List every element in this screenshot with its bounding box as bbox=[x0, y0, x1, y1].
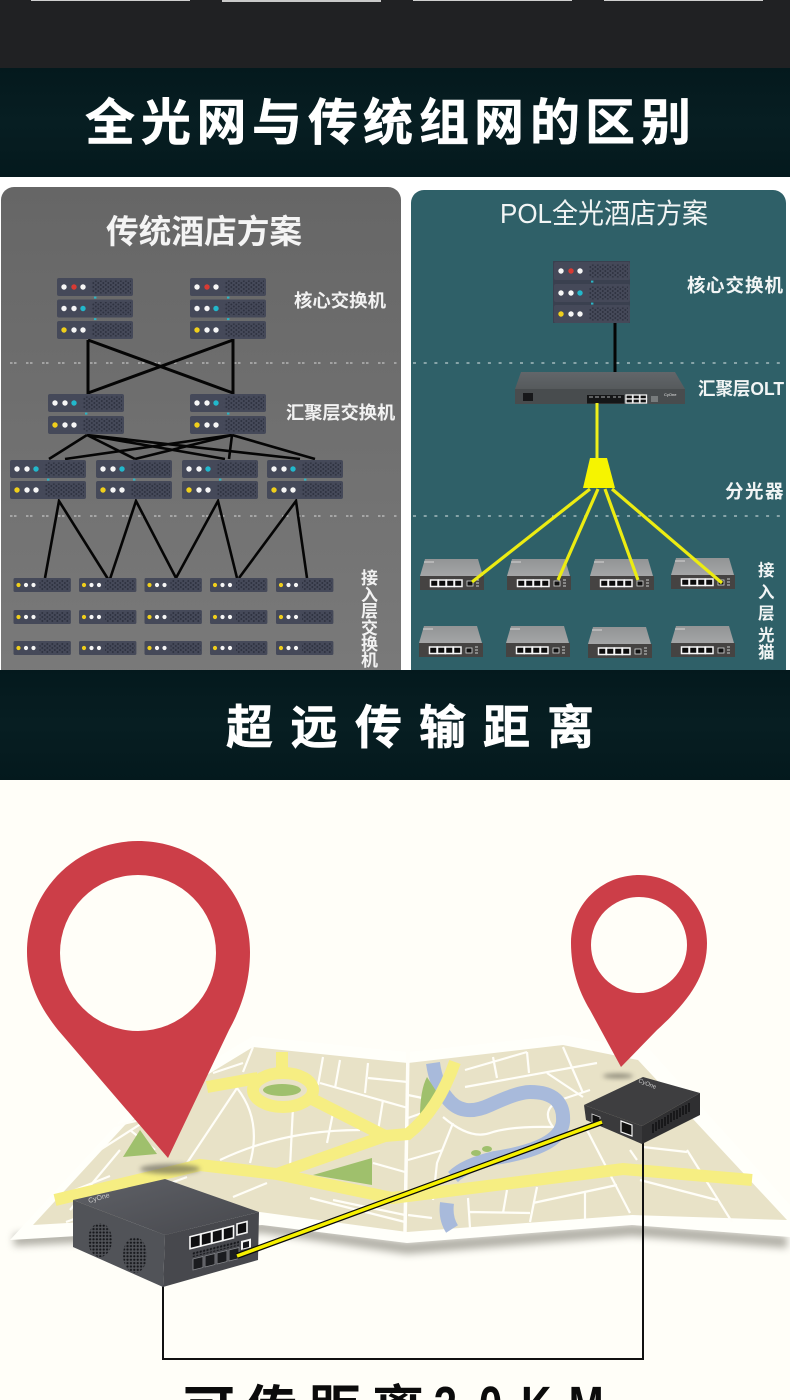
link: core to OLT bbox=[614, 323, 616, 373]
panel bottom white gap cover on the left and right edges bbox=[0, 640, 790, 671]
illustration: folded city map bbox=[10, 1035, 790, 1254]
green parks bbox=[123, 1077, 492, 1185]
label: aggregation OLT: 汇聚层OLT bbox=[698, 379, 784, 399]
pin hole bbox=[591, 897, 687, 993]
front ports bbox=[190, 1220, 251, 1271]
label: core switch: 核心交换机 bbox=[687, 275, 784, 296]
OLT mini device, lower left bbox=[73, 1179, 259, 1287]
distance caption, clipped by page edge bbox=[183, 1376, 604, 1400]
tier dividers bbox=[413, 363, 784, 516]
panel title: POL: POL全光酒店方案 bbox=[500, 198, 708, 229]
side vents bbox=[653, 1103, 689, 1133]
label: access modem, vertical: 接入层光猫 bbox=[758, 561, 775, 662]
river bbox=[433, 1063, 563, 1229]
street grid bbox=[60, 1047, 732, 1232]
label: core switch: 核心交换机 bbox=[294, 290, 387, 311]
heading band: 超远传输距离: 超远传输距离 bbox=[226, 701, 594, 754]
panel: traditional hotel solution bbox=[1, 187, 401, 687]
core to aggregation links bbox=[88, 340, 233, 393]
OLT device bbox=[515, 372, 685, 404]
pin shadow bbox=[140, 1164, 200, 1174]
mini modem device, right bbox=[584, 1077, 700, 1144]
small location pin bbox=[571, 875, 707, 1078]
panel title: traditional: 传统酒店方案 bbox=[106, 213, 302, 250]
side vents bbox=[88, 1223, 112, 1257]
paper shadow bbox=[14, 1222, 787, 1254]
pin body bbox=[27, 841, 250, 1158]
OLT logo: CyOne bbox=[664, 392, 677, 397]
aggregation switches bbox=[48, 394, 266, 434]
yellow fibre cable between devices bbox=[237, 1122, 602, 1256]
pin shadow bbox=[603, 1074, 633, 1078]
fibre port bbox=[592, 1114, 600, 1125]
label: splitter: 分光器 bbox=[725, 481, 784, 502]
label: access switch, vertical: 接入层交换机 bbox=[361, 569, 378, 670]
distribution to access links bbox=[45, 501, 307, 579]
access switches bbox=[14, 578, 333, 655]
pin body bbox=[571, 875, 707, 1067]
label: aggregation switch: 汇聚层交换机 bbox=[286, 402, 395, 423]
fibre: OLT to splitter bbox=[596, 403, 598, 459]
heading band: 超远传输距离 bbox=[0, 670, 790, 780]
large location pin bbox=[27, 841, 250, 1174]
distribution switches bbox=[10, 460, 343, 499]
pin hole bbox=[60, 875, 216, 1031]
device logo: CyOne bbox=[637, 1078, 657, 1091]
top dark band with product strips bbox=[0, 0, 790, 68]
access optical modems bbox=[419, 558, 735, 658]
heading band: 全光网与传统组网的区别 bbox=[0, 68, 790, 177]
section background: long-distance transmission bbox=[0, 780, 790, 1400]
panel: POL all-optical hotel solution bbox=[411, 190, 786, 687]
map land bbox=[33, 1045, 787, 1232]
heading band: 全光网与传统组网的区别: 全光网与传统组网的区别 bbox=[85, 95, 691, 151]
device logo: CyOne bbox=[88, 1192, 111, 1205]
yellow main roads bbox=[55, 1052, 752, 1200]
paper sheet bbox=[10, 1035, 790, 1243]
aggregation to distribution links bbox=[49, 435, 315, 459]
connector bracket: distance line bbox=[163, 1140, 643, 1359]
tier dividers bbox=[10, 363, 398, 516]
core switches bbox=[57, 278, 266, 339]
optical fibres to modems bbox=[472, 489, 722, 583]
core switch stack bbox=[553, 261, 630, 323]
front RJ45 port bbox=[621, 1121, 632, 1136]
optical splitter bbox=[583, 458, 615, 488]
